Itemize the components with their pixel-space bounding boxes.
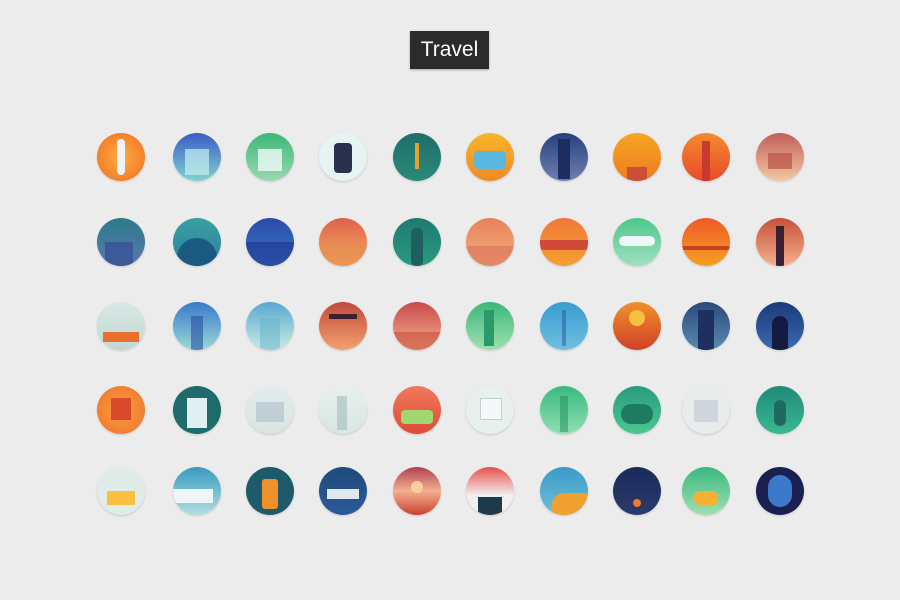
icon: colosseum bbox=[97, 218, 145, 266]
icon: forbidden city bbox=[97, 302, 145, 350]
icon: eiffel tower bbox=[756, 218, 804, 266]
icon: palm tree bbox=[393, 133, 441, 181]
icon: backpack bbox=[319, 133, 367, 181]
icon: camp night bbox=[613, 467, 661, 515]
icon: airplane bbox=[97, 133, 145, 181]
icon: savanna bbox=[393, 302, 441, 350]
icon: airplane window bbox=[756, 467, 804, 515]
icon: car bbox=[393, 386, 441, 434]
icon: moai bbox=[393, 218, 441, 266]
icon: christ green bbox=[540, 386, 588, 434]
icon: volcano bbox=[466, 467, 514, 515]
icon: trees bbox=[613, 386, 661, 434]
icon: bus bbox=[466, 133, 514, 181]
icon: underwater bbox=[246, 218, 294, 266]
title bbox=[410, 31, 489, 69]
icon: train bbox=[173, 467, 221, 515]
icon: parthenon bbox=[246, 386, 294, 434]
icon: windmill bbox=[173, 302, 221, 350]
title: Travel bbox=[421, 38, 478, 61]
icon: plane green bbox=[613, 218, 661, 266]
icon: pisa bbox=[319, 386, 367, 434]
icon: tower blue bbox=[540, 302, 588, 350]
icon: scooter bbox=[682, 467, 730, 515]
icon: big ben bbox=[540, 133, 588, 181]
icon: arch bbox=[173, 133, 221, 181]
icon: statue of liberty bbox=[466, 302, 514, 350]
icon: burj bbox=[682, 133, 730, 181]
icon: suitcase bbox=[246, 467, 294, 515]
icon: pyramid temple bbox=[756, 133, 804, 181]
icon: ship bbox=[319, 467, 367, 515]
icon: market stall bbox=[246, 133, 294, 181]
icon: beach bbox=[540, 467, 588, 515]
icon: sunset road bbox=[393, 467, 441, 515]
icon: torii bbox=[319, 302, 367, 350]
icon: sunset bbox=[613, 302, 661, 350]
icon: camera bbox=[466, 386, 514, 434]
icon: christ statue bbox=[613, 133, 661, 181]
icon: green statue bbox=[756, 386, 804, 434]
icon: mountains bbox=[246, 302, 294, 350]
icon: compass map bbox=[97, 467, 145, 515]
icon: great wall bbox=[540, 218, 588, 266]
icon: hotel bbox=[173, 386, 221, 434]
icon: desert bbox=[319, 218, 367, 266]
icon: taj mahal bbox=[682, 386, 730, 434]
icon: desert moon bbox=[466, 218, 514, 266]
icon: globe bbox=[173, 218, 221, 266]
icon: golden gate bbox=[682, 218, 730, 266]
icon: skyline bbox=[682, 302, 730, 350]
icon: window silhouette bbox=[756, 302, 804, 350]
icon: star badge bbox=[97, 386, 145, 434]
